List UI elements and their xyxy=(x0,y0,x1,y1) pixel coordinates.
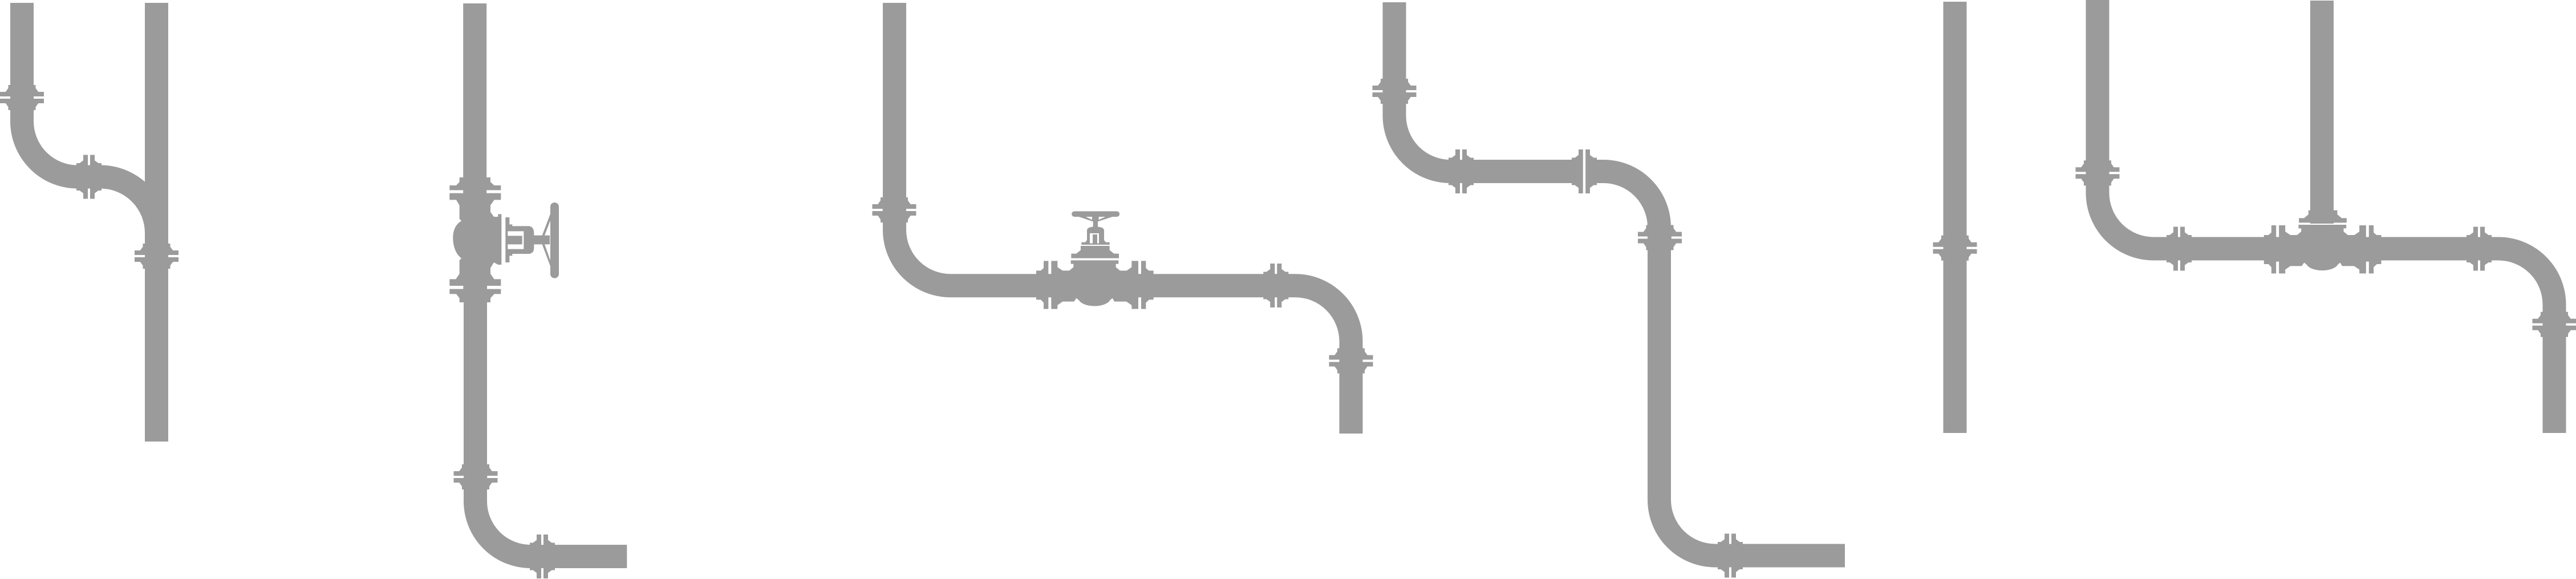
flange: top xyxy=(1372,79,1417,104)
flange: outlet xyxy=(1329,348,1373,373)
pipe assembly 2: vertical pipe with side-handle valve and elbow xyxy=(449,3,627,578)
flange: branch top xyxy=(0,85,44,110)
pipe run xyxy=(1394,2,1845,556)
pipe assembly 6: run with tee valve xyxy=(2076,0,2576,433)
flange: outlet xyxy=(2532,312,2576,337)
handwheel xyxy=(550,203,559,278)
pipe assembly 3: run with top-handle valve xyxy=(873,3,1373,434)
branch pipe with two elbows xyxy=(22,3,156,256)
flange: branch middle xyxy=(76,155,102,199)
flange xyxy=(1933,236,1977,261)
pipe assembly 4: stepped pipe xyxy=(1372,2,1845,577)
flange: top xyxy=(2076,160,2119,185)
flange: elbow end xyxy=(530,535,555,578)
flange: left run xyxy=(2167,227,2192,270)
valve body xyxy=(2264,210,2381,273)
flange: right run xyxy=(2467,227,2492,270)
lower pipe with elbow xyxy=(475,285,627,557)
flange: split joint xyxy=(1572,149,1597,193)
flange: upper run xyxy=(1449,149,1474,193)
valve bonnet xyxy=(505,217,550,262)
pipe assembly 5: straight vertical pipe xyxy=(1933,2,1977,433)
handwheel spokes xyxy=(542,214,550,266)
pipe xyxy=(1944,2,1966,433)
flange: elbow top xyxy=(454,464,497,489)
pipe assembly 1: branch joining vertical pipe xyxy=(0,3,179,442)
flange: main pipe xyxy=(135,244,179,269)
gate valve with side handwheel xyxy=(449,177,559,302)
gate valve with top handwheel xyxy=(1036,211,1154,309)
pipe run xyxy=(2098,0,2554,433)
valve body xyxy=(449,177,501,302)
valve body xyxy=(1036,246,1154,309)
pipe run xyxy=(894,3,1351,434)
flange: lower bend xyxy=(1718,534,1743,577)
flange: right run xyxy=(1263,264,1288,307)
vertical main pipe xyxy=(145,3,168,442)
valve stem and handwheel xyxy=(1072,211,1119,245)
bonnet cutout xyxy=(508,231,524,249)
split joint gap xyxy=(1583,148,1585,195)
handwheel details xyxy=(1086,217,1105,244)
upper vertical pipe xyxy=(463,3,486,194)
flange: top xyxy=(873,197,916,222)
vertical stem pipe xyxy=(2310,1,2334,224)
flange: upper bend xyxy=(1638,225,1682,250)
